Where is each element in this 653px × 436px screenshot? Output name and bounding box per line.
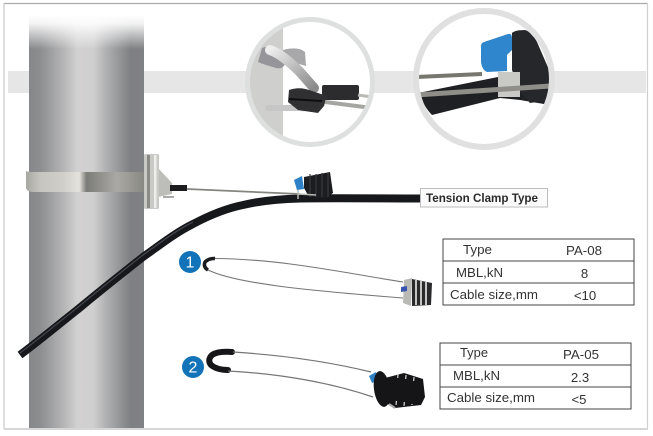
badge 2: 2 xyxy=(189,360,198,376)
table: PA-05 xyxy=(440,343,631,409)
pole xyxy=(29,15,144,428)
clamp on cable: support wire and body xyxy=(187,172,333,199)
table: PA-08: PA-08 xyxy=(566,243,602,258)
table: PA-08: MBL,kN xyxy=(456,265,503,280)
aerial cable xyxy=(20,198,422,355)
detail circle: anchor bracket xyxy=(245,20,372,145)
wall bracket xyxy=(144,154,187,209)
item 1: clamp PA-08 xyxy=(179,251,432,306)
table: PA-08: Cable size,mm xyxy=(450,287,538,302)
table: PA-05: <5 xyxy=(571,392,587,407)
background band xyxy=(8,71,646,93)
badge 1: 1 xyxy=(186,254,195,272)
badge 2 xyxy=(182,356,204,378)
table: PA-05: PA-05 xyxy=(563,347,599,362)
table: PA-05: Type xyxy=(460,345,488,360)
table: PA-08: Type xyxy=(463,242,492,257)
table: PA-08: 8 xyxy=(581,266,588,281)
item 2: clamp PA-05 xyxy=(182,352,425,408)
pole strap xyxy=(26,171,147,192)
table: PA-08: <10 xyxy=(574,288,596,303)
label: Tension Clamp Type xyxy=(420,188,548,207)
table: PA-08 xyxy=(443,239,634,305)
label: Tension Clamp Type: Tension Clamp Type xyxy=(426,191,538,205)
badge 1 xyxy=(179,251,201,273)
table: PA-05: Cable size,mm xyxy=(447,390,535,405)
detail circle: tension clamp close-up xyxy=(416,11,552,147)
table: PA-05: MBL,kN xyxy=(453,368,500,383)
table: PA-05: 2.3 xyxy=(571,370,589,385)
